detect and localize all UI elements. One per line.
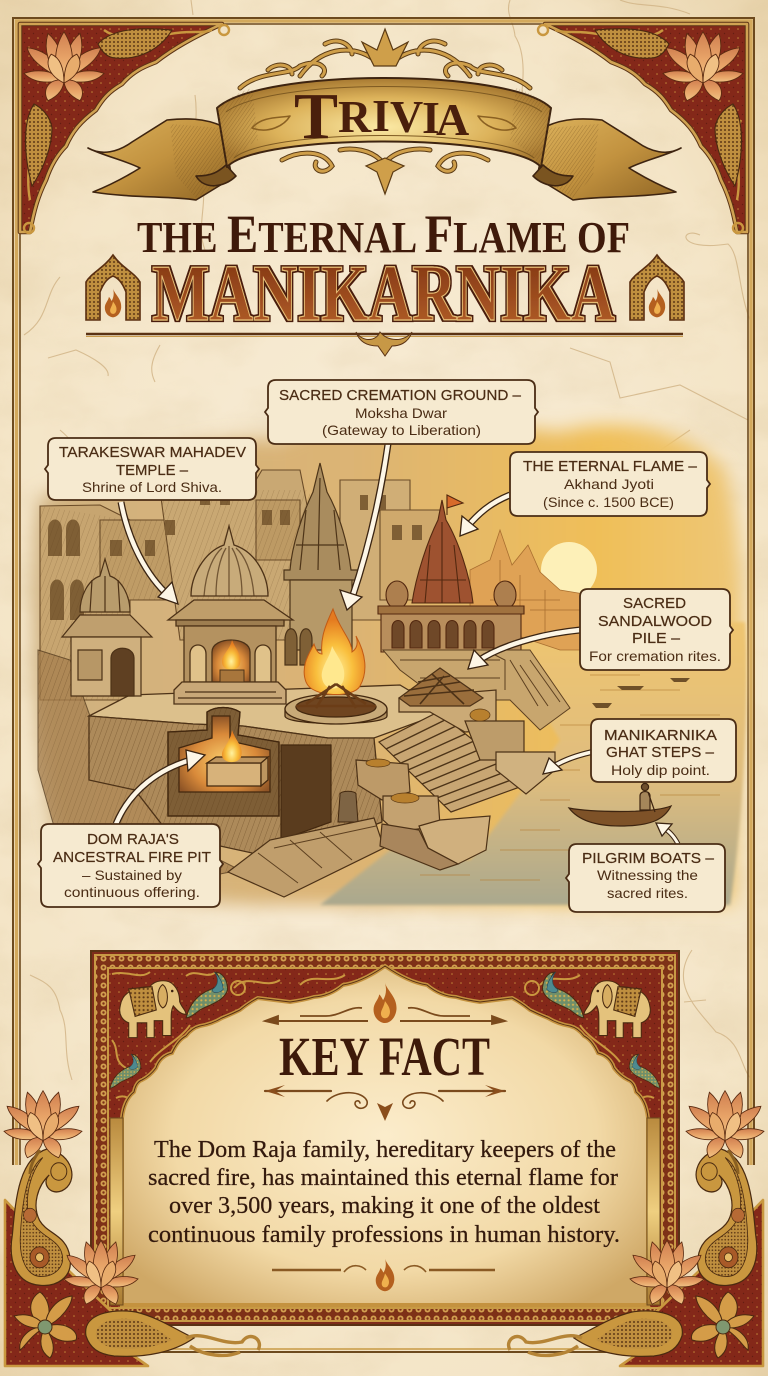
top flourish — [265, 1008, 505, 1024]
callout: pilgrim boats: PILGRIM BOATS – — [582, 851, 715, 867]
icon: right arch with flame — [630, 255, 684, 320]
city left and centre — [40, 470, 440, 700]
key fact heading: KEY FACT — [279, 1026, 490, 1087]
pillar right — [647, 1118, 660, 1305]
banner title: V — [390, 91, 423, 142]
callout: pilgrim boats: Witnessing the — [597, 867, 698, 883]
fire pit cross-section — [168, 708, 279, 816]
trivia ribbon banner — [88, 78, 681, 200]
corner ornament bottom-left — [4, 1091, 259, 1366]
bottom divider with flame — [272, 1259, 495, 1291]
ribbon left tail — [88, 119, 232, 200]
callout: tarakeswar temple: TARAKESWAR MAHADEV — [59, 445, 246, 461]
heading divider — [265, 1085, 505, 1121]
base strip below frame — [130, 1349, 640, 1352]
patterned frame band — [96, 956, 674, 1320]
central fire — [296, 609, 376, 708]
arrow: eternal flame — [460, 495, 510, 536]
title divider — [86, 332, 683, 356]
stone blocks with offerings — [356, 690, 555, 870]
arched parchment — [122, 966, 648, 1305]
distant city right — [470, 530, 640, 650]
callout: dom raja fire pit: DOM RAJA'S — [87, 832, 179, 848]
callout: dom raja fire pit: – Sustained by — [82, 867, 182, 883]
icon: top flame — [374, 983, 397, 1023]
stone jar — [338, 791, 358, 822]
callout: sandalwood pile: SACRED — [623, 596, 686, 612]
callout: sandalwood pile: PILE – — [632, 631, 681, 647]
central pyre ring — [285, 694, 387, 724]
banner title: R — [338, 91, 372, 142]
callout: tarakeswar temple: Shrine of Lord Shiva. — [82, 479, 222, 495]
sky wash — [33, 418, 742, 905]
callout: ghat steps: MANIKARNIKA — [604, 728, 717, 744]
banner title: T — [294, 80, 338, 153]
shrine inner flame — [222, 640, 240, 670]
sun — [541, 542, 597, 598]
left rock and lower wall — [38, 650, 240, 880]
arrow: sandalwood — [468, 630, 580, 669]
platform top — [89, 685, 445, 738]
key fact text: over 3,500 years, making it one of the oldest — [169, 1192, 600, 1219]
key fact text: continuous family professions in human history. — [148, 1221, 620, 1248]
red temple — [378, 495, 524, 652]
peacock lower right — [629, 1054, 660, 1088]
platform front wall — [89, 716, 382, 860]
main stairs — [379, 712, 528, 812]
corner ornament bottom-right — [509, 1091, 764, 1366]
pillar left — [110, 1118, 123, 1305]
peacock top right — [542, 972, 584, 1018]
peacock lower left — [110, 1054, 141, 1088]
small left shrine — [62, 559, 152, 696]
title line 2: MANIKARNIKA — [152, 250, 615, 338]
stone walkway — [228, 818, 384, 897]
key fact text: The Dom Raja family, hereditary keepers of the — [154, 1136, 616, 1163]
callout: eternal flame — [510, 452, 710, 516]
callout: pilgrim boats: sacred rites. — [607, 885, 688, 901]
illustration: cremation ghat scene — [33, 418, 747, 905]
callout: sacred cremation ground: Moksha Dwar — [355, 405, 447, 421]
callout: tarakeswar temple — [45, 438, 259, 500]
banner title: I — [422, 92, 440, 143]
dark chamber — [281, 745, 331, 840]
ribbon right tail — [537, 119, 681, 200]
arrow: fire pit — [116, 750, 205, 824]
tarakeswar shrine — [168, 526, 293, 704]
callout: ghat steps: GHAT STEPS – — [606, 745, 715, 761]
ribbon front — [217, 78, 551, 167]
callout: sacred cremation ground: (Gateway to Liberation) — [322, 422, 481, 438]
ornament above banner — [240, 29, 530, 88]
elephant left — [120, 981, 186, 1038]
gold arabesque in frame — [112, 972, 654, 1112]
corner ornament top-right — [538, 24, 747, 233]
callout: eternal flame: Akhand Jyoti — [564, 476, 654, 492]
arrow: ghat steps — [543, 752, 592, 774]
callout: sandalwood pile — [580, 589, 733, 670]
elephant right — [584, 981, 650, 1038]
ornament below banner — [282, 149, 488, 194]
river — [320, 622, 747, 905]
callout: sacred cremation ground — [265, 380, 538, 444]
callout: dom raja fire pit: continuous offering. — [64, 884, 200, 900]
back stairs right — [383, 650, 570, 730]
main title — [137, 204, 630, 338]
banner title: I — [372, 90, 390, 141]
corner ornament top-left — [20, 24, 229, 233]
callout: ghat steps: Holy dip point. — [611, 762, 710, 778]
key fact text: sacred fire, has maintained this eternal flame for — [148, 1164, 618, 1191]
peacock top left — [186, 972, 228, 1018]
arrow: boats — [656, 823, 678, 844]
distant boats — [592, 678, 690, 708]
banner title: A — [436, 94, 469, 145]
callout: dom raja fire pit — [38, 824, 223, 907]
callout: ghat steps — [591, 719, 736, 782]
callout: eternal flame: (Since c. 1500 BCE) — [543, 494, 674, 510]
sandalwood pile — [399, 668, 483, 706]
fire pit flame — [222, 730, 242, 762]
back temple — [284, 463, 358, 665]
arrow: cremation ground to flame — [340, 444, 388, 610]
icon: left arch with flame — [86, 255, 140, 320]
callout: sacred cremation ground: SACRED CREMATION GROUND – — [279, 388, 522, 404]
callout: sandalwood pile: SANDALWOOD — [598, 614, 712, 630]
arrow: shrine — [121, 502, 178, 604]
panel: key fact frame — [91, 951, 679, 1325]
title line 1: THE ETERNAL FLAME OF — [137, 204, 630, 264]
frame backing — [91, 951, 679, 1325]
callout: dom raja fire pit: ANCESTRAL FIRE PIT — [53, 850, 211, 866]
callout: pilgrim boats — [566, 844, 725, 912]
boat — [569, 783, 671, 826]
banner flourishes — [252, 116, 516, 130]
callout: eternal flame: THE ETERNAL FLAME – — [523, 459, 698, 475]
key fact text — [148, 1136, 620, 1248]
callout: sandalwood pile: For cremation rites. — [589, 648, 721, 664]
callout: tarakeswar temple: TEMPLE – — [116, 463, 189, 479]
